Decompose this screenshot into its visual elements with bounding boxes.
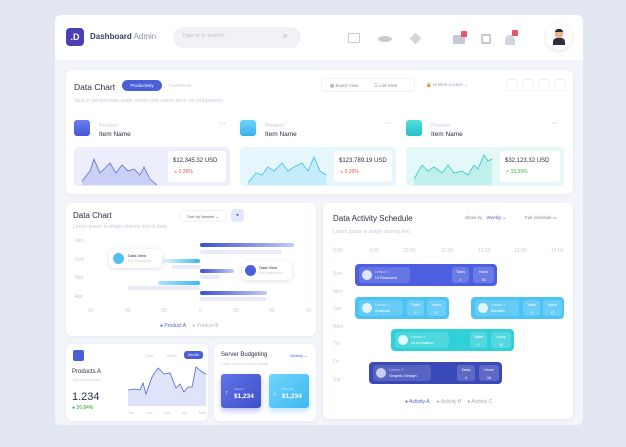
search box: ⌕	[283, 31, 287, 40]
panel: top data chart: Timesheets	[168, 83, 191, 88]
bar chart: 60	[88, 308, 94, 314]
panel: products A: ● 26.84%	[72, 405, 93, 411]
activity: blender: Tasks	[527, 303, 536, 307]
tooltip A: Put Description	[128, 259, 152, 263]
activity: analysis	[355, 297, 449, 319]
view toggles	[321, 78, 415, 92]
activity: UI animation: Lesson 3	[411, 335, 425, 339]
panel: data activity schedule: 10:00	[403, 248, 416, 254]
header icons	[348, 33, 360, 43]
panel: server budgeting: Weekly ⌄	[290, 353, 308, 358]
bar chart: 20	[161, 308, 167, 314]
product card 2: ···	[385, 120, 392, 127]
panel: data activity schedule: 14:00	[551, 248, 564, 254]
product card 2: ↘ 0,39%	[339, 169, 359, 175]
bar chart: 40	[125, 308, 131, 314]
heading: Data Chart	[74, 82, 115, 92]
avatar	[546, 24, 572, 50]
day labels: Wed	[333, 324, 343, 330]
activity: blender: Blender	[491, 308, 505, 313]
panel: data activity schedule: 11:00	[441, 248, 453, 254]
activity: blender: Hours	[548, 303, 557, 307]
panel: data activity schedule: 13:00	[514, 248, 527, 254]
sort dropdown	[180, 210, 226, 222]
day labels: Sat	[333, 377, 341, 383]
activity: UI animation: Hours	[496, 335, 506, 339]
logo	[66, 28, 84, 46]
activity: analysis: 12	[435, 311, 438, 315]
heading: Data Chart	[73, 211, 112, 220]
income card: ↑	[225, 390, 228, 397]
period tabs: Day	[146, 353, 153, 358]
activity: graphic design: 4	[465, 376, 467, 380]
panel: data activity schedule: Show by Weekly ⌄	[465, 215, 506, 220]
activity: analysis: Tasks	[411, 303, 420, 307]
expense card: Expense	[282, 387, 294, 391]
activity: graphic design: 16	[487, 376, 491, 380]
tooltip A	[109, 249, 162, 268]
panel: data chart bars: Lorem Ipsum is simply dummy text of data	[73, 224, 167, 230]
activity: graphic design	[369, 362, 502, 384]
panel: top data chart: 🔒 Limited Access ⌄	[426, 82, 468, 87]
activity: blender: 3	[531, 311, 532, 315]
tabs	[122, 80, 162, 91]
day labels: Mon	[333, 289, 343, 295]
value: 1.234	[72, 391, 100, 403]
bar chart: Apr	[75, 294, 83, 300]
legend: ● Product A ● Product B	[160, 323, 219, 329]
brand name: Dashboard Admin	[90, 32, 156, 41]
product card 3: Item Name	[431, 131, 463, 138]
activity: graphic design: Hours	[484, 368, 494, 372]
tooltip B: Put Description	[259, 271, 283, 275]
panel: server budgeting	[214, 344, 316, 421]
activity: UI animation: 16	[499, 343, 503, 347]
activity: blender: Lesson 3	[491, 303, 505, 307]
day labels: Fri	[333, 359, 339, 365]
tooltip B: Data View	[259, 265, 277, 270]
product card 2: $123,789.19 USD	[339, 158, 387, 164]
panel: products A: 445 Impressions	[72, 378, 100, 382]
product card 2	[240, 120, 396, 186]
panel: data activity schedule: 9:00	[369, 248, 379, 254]
product card 1: $12,345.32 USD	[173, 158, 217, 164]
product card 1: ···	[219, 120, 226, 127]
search box	[173, 27, 301, 48]
activity: graphic design: Lesson 3	[389, 368, 403, 372]
tool icons	[506, 79, 518, 91]
activity: analysis: Lesson 3	[375, 303, 389, 307]
legend: ● Activity A ● Activity B ● Activity C	[405, 399, 492, 405]
product card 3: $32,123.32 USD	[505, 158, 549, 164]
subtitle: Sed ut perspiciatis unde omnis iste natus error sit voluptatem	[74, 98, 223, 104]
product card 1: ↘ 0,39%	[173, 169, 193, 175]
income card: $1,234	[234, 393, 254, 400]
view toggles: ☰ List View	[374, 83, 397, 88]
activity: UI research: Lesson 3	[375, 270, 389, 274]
activity: UI animation: 4	[478, 343, 479, 347]
panel: top data chart	[66, 70, 573, 194]
product card 1	[74, 120, 230, 186]
tooltip A: Data View	[128, 253, 146, 258]
activity: graphic design: Tasks	[462, 368, 470, 372]
tooltip B	[242, 261, 292, 280]
day labels: Thi	[333, 341, 340, 347]
panel: products A: Week	[167, 353, 177, 358]
panel: data activity schedule: Lorem Ipsum is simply dummy text	[333, 229, 410, 235]
activity: UI animation: UI Animation	[411, 340, 434, 345]
bar chart: 60	[306, 308, 312, 314]
activity: UI research: Tasks	[456, 270, 465, 274]
expense card: $1,234	[282, 393, 302, 400]
bar chart: Feb	[75, 257, 84, 263]
product card 1: Item Name	[99, 131, 131, 138]
time axis: 8:00	[333, 248, 343, 254]
bar chart: 0	[199, 308, 202, 314]
panel: products A: Month	[188, 353, 199, 357]
day labels	[333, 271, 343, 383]
area chart	[128, 366, 206, 406]
panel: data chart bars	[66, 203, 316, 336]
day labels: Sun	[333, 271, 342, 277]
tabs: Productivity	[130, 83, 154, 88]
search box: Type in to search ..	[182, 33, 228, 39]
activity: UI research: UI Research	[375, 275, 397, 280]
panel: data activity schedule: Full schedule ▭	[525, 215, 557, 220]
product card 1: Product	[99, 123, 118, 129]
activity: UI animation: Tasks	[474, 335, 483, 339]
panel: data activity schedule	[323, 203, 573, 419]
activity: analysis: 3	[415, 311, 416, 315]
product card 3	[406, 120, 564, 186]
panel: products A: Products A	[72, 369, 101, 375]
day labels: Tue	[333, 306, 341, 312]
grid icon: ▪	[236, 212, 239, 219]
activity: analysis: Hours	[432, 303, 441, 307]
view toggles: ▦ Board View	[330, 83, 358, 88]
panel: server budgeting: Lorem Ipsum is simply dummy	[221, 362, 268, 366]
bar chart: Jan	[75, 238, 83, 244]
grid icon	[231, 209, 244, 222]
panel: products A	[66, 344, 208, 421]
income card: Income	[234, 387, 244, 391]
expense card	[269, 374, 309, 408]
sort dropdown: Sort by Newest ⌄	[187, 214, 219, 219]
income card	[221, 374, 261, 408]
activity: UI research: Hours	[479, 270, 488, 274]
main container	[55, 15, 583, 425]
product card 2: Product	[265, 123, 284, 129]
bar chart	[75, 238, 312, 314]
product card 3: ···	[551, 120, 558, 127]
activity: UI research: 4	[460, 278, 461, 282]
activity: UI animation	[391, 329, 514, 351]
bar chart: 40	[269, 308, 275, 314]
expense card: ↓	[273, 390, 276, 397]
panel: server budgeting: Server Budgeting	[221, 352, 267, 358]
activity: UI research	[355, 264, 497, 286]
activity: blender	[471, 297, 564, 319]
panel: products A: Jan Feb Mar Apr May	[128, 410, 206, 415]
activity: analysis: Analysis	[375, 308, 390, 313]
panel: data activity schedule: 12:00	[478, 248, 491, 254]
panel: data activity schedule: Data Activity Schedule	[333, 214, 413, 223]
product card 3: ↗ 15,39%	[505, 169, 528, 175]
bar chart: Mar	[75, 275, 84, 281]
activity: UI research: 16	[482, 278, 485, 282]
bar chart: 20	[233, 308, 239, 314]
header bar	[55, 15, 583, 60]
activity: graphic design: Graphic Design	[389, 373, 417, 378]
logo: .D	[70, 32, 80, 42]
product card 2: Item Name	[265, 131, 297, 138]
activity: blender: 12	[551, 311, 554, 315]
product card 3: Product	[431, 123, 450, 129]
